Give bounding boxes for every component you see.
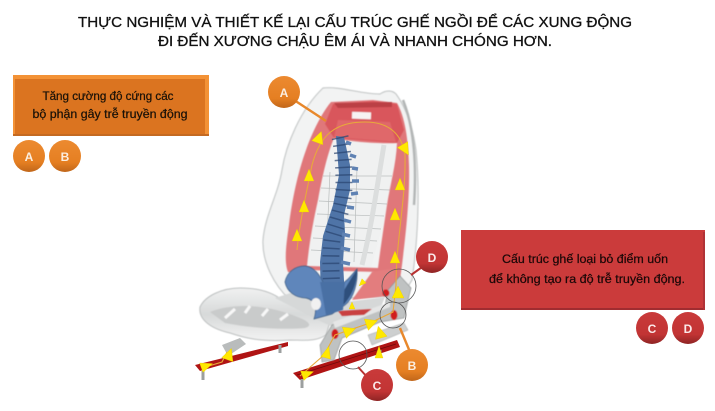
title bbox=[78, 13, 632, 50]
badge: D legend bbox=[672, 312, 704, 344]
callout marker D with ring bbox=[382, 241, 448, 303]
callout marker A bbox=[268, 76, 326, 121]
seat back glass shell bbox=[263, 88, 418, 300]
bending point callout text bbox=[489, 252, 685, 286]
badge: C legend: C bbox=[648, 322, 657, 336]
badge: A legend: A bbox=[25, 150, 34, 164]
yellow force flow line bbox=[202, 122, 405, 376]
badge: D legend: D bbox=[684, 322, 693, 336]
bending point callout text: Cấu trúc ghế loại bỏ điểm uốn bbox=[502, 252, 668, 266]
seat back mesh bbox=[311, 145, 392, 265]
yellow force arrows bbox=[200, 129, 414, 380]
badge: B legend: B bbox=[61, 150, 70, 164]
title: ĐI ĐẾN XƯƠNG CHẬU ÊM ÁI VÀ NHANH CHÓNG HƠN. bbox=[158, 33, 552, 50]
badge: A legend bbox=[13, 140, 45, 172]
bending point callout text: để không tạo ra độ trễ truyền động. bbox=[489, 271, 685, 286]
spine bbox=[320, 136, 359, 300]
stiffness callout text bbox=[32, 89, 188, 121]
callout marker D with ring: D bbox=[428, 251, 437, 265]
stiffness callout text: Tăng cường độ cứng các bbox=[42, 89, 174, 103]
callout marker A: A bbox=[280, 86, 289, 100]
right floor rail bbox=[293, 340, 400, 388]
panel: stiffness callout bbox=[13, 75, 209, 136]
callout marker C with ring: C bbox=[373, 379, 382, 393]
callout marker B with ring bbox=[380, 302, 428, 381]
panel: bending point callout bbox=[461, 230, 705, 310]
callout marker C with ring bbox=[339, 341, 393, 401]
badge: C legend bbox=[636, 312, 668, 344]
seat back inner foam bbox=[305, 138, 397, 268]
stiffness callout text: bộ phận gây trễ truyền động bbox=[32, 106, 188, 121]
callout marker B with ring: B bbox=[408, 359, 417, 373]
red seat back frame bbox=[286, 100, 409, 300]
title: THỰC NGHIỆM VÀ THIẾT KẾ LẠI CẤU TRÚC GHẾ NGỒI ĐỂ CÁC XUNG ĐỘNG bbox=[78, 13, 632, 31]
side frame mechanism bbox=[320, 276, 411, 362]
pelvis bbox=[285, 266, 357, 319]
seat illustration bbox=[195, 88, 418, 388]
badge: B legend bbox=[49, 140, 81, 172]
left floor rail bbox=[195, 338, 288, 380]
seat cushion and base bbox=[200, 288, 385, 341]
headrest slot bbox=[352, 112, 371, 119]
